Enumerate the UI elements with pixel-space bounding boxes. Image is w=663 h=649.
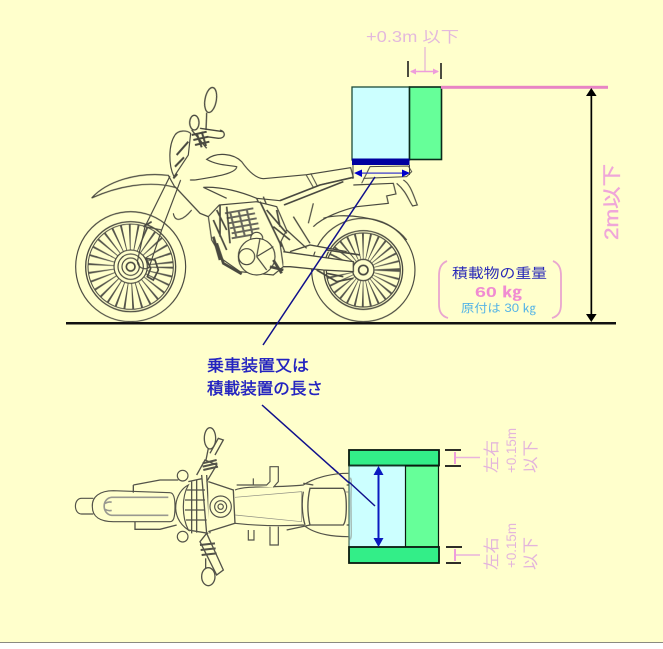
rear frame and muffler xyxy=(308,183,407,240)
rear wheel xyxy=(312,218,415,322)
top view load: side overhang lower xyxy=(349,547,439,563)
overhang dimension +0.3m: +0.3m 以下 xyxy=(366,29,459,46)
side overhang dimension upper: +0.15m xyxy=(504,428,519,473)
handlebar and mirror xyxy=(203,87,218,113)
label: carrier length: 乗車装置又は xyxy=(207,357,309,375)
footpegs xyxy=(237,467,278,545)
weight callout: 積載物の重量 xyxy=(452,266,547,281)
top view load: side overhang upper xyxy=(349,450,439,466)
height limit line xyxy=(441,86,608,89)
top view seat outline over load xyxy=(345,478,352,540)
headlight and cluster xyxy=(176,485,188,530)
top view width arrow xyxy=(374,466,384,547)
front fork xyxy=(137,176,192,267)
luggage box: rear overhang (green) xyxy=(410,87,442,160)
leader line to top view carrier xyxy=(262,405,375,506)
weight callout: 原付は 30 ㎏ xyxy=(461,302,537,315)
handlebars xyxy=(197,460,223,575)
label: 2m以下: 2m以下 xyxy=(602,164,623,240)
front fender xyxy=(92,175,175,198)
front wheel and fender xyxy=(75,498,93,514)
weight callout: 60 ㎏ xyxy=(475,284,522,302)
luggage box: base load (blue) xyxy=(352,87,410,160)
tank xyxy=(208,482,235,532)
motorcycle side view xyxy=(76,87,417,322)
number plate xyxy=(170,131,191,177)
carrier length arrow xyxy=(352,165,410,179)
tail fender xyxy=(397,180,417,206)
label: carrier length: 積載装置の長さ xyxy=(207,380,323,398)
label: carrier length xyxy=(207,357,323,398)
height arrow 2m xyxy=(586,88,597,322)
overhang dimension +0.3m xyxy=(366,29,459,79)
front wheel xyxy=(76,212,186,322)
side overhang dimension upper: 左右 xyxy=(483,440,501,473)
forks xyxy=(133,480,178,529)
ground line xyxy=(66,322,616,324)
weight callout xyxy=(439,261,561,318)
motorcycle top view xyxy=(75,428,349,586)
side overhang dimension upper xyxy=(445,428,540,473)
side overhang dimension upper: 以下 xyxy=(523,440,540,473)
swingarm xyxy=(283,245,353,272)
leader line to side view carrier xyxy=(263,177,375,345)
seat xyxy=(235,492,302,522)
top view load: base area xyxy=(349,466,406,547)
leader line end over load xyxy=(349,482,375,506)
side overhang dimension lower xyxy=(446,523,540,570)
side overhang dimension lower: 以下 xyxy=(523,537,540,570)
side overhang dimension lower: 左右 xyxy=(483,537,501,570)
fuel tank, seat and frame xyxy=(195,154,353,201)
engine xyxy=(208,202,290,275)
carrier bar xyxy=(352,158,410,165)
side overhang dimension lower: +0.15m xyxy=(504,523,519,568)
top view load: rear overhang xyxy=(406,466,438,547)
